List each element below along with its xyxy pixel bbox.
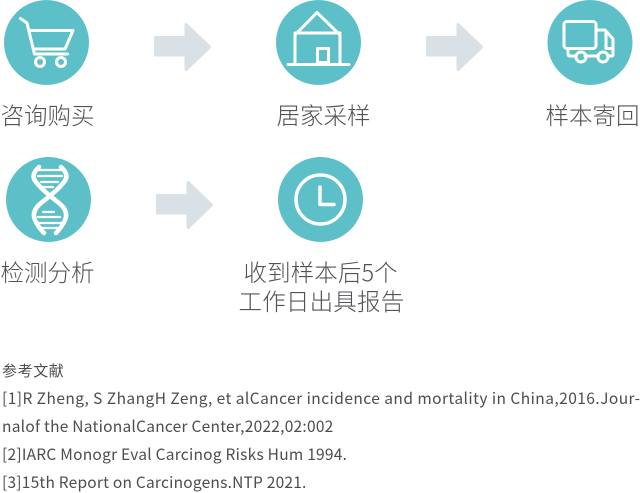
- icon: house: [276, 0, 361, 85]
- icon: shopping cart: [4, 0, 89, 85]
- references heading: 参考文献: [2, 360, 64, 381]
- references list: [2, 387, 640, 493]
- label: step 1: 咨询购买: [0, 97, 94, 131]
- label: step 3: 样本寄回: [546, 97, 640, 131]
- arrow: step 4 to step 5: [158, 182, 212, 228]
- references list: [1]R Zheng, S ZhangH Zeng, et alCancer incidence and mortality in China,2016.Jour-: [2, 387, 640, 409]
- label: step 5: [238, 254, 404, 317]
- icon: DNA helix: [6, 157, 91, 242]
- arrow: step 2 to step 3: [428, 24, 482, 70]
- icon: clock: [278, 157, 363, 242]
- label: step 5: 收到样本后5个: [244, 254, 398, 288]
- label: step 5: 工作日出具报告: [238, 283, 404, 317]
- references list: [3]15th Report on Carcinogens.NTP 2021.: [2, 471, 307, 493]
- icon: delivery truck: [548, 0, 632, 85]
- references list: nalof the NationalCancer Center,2022,02:002: [2, 415, 334, 437]
- label: step 2: 居家采样: [276, 97, 370, 131]
- arrow: step 1 to step 2: [156, 24, 210, 70]
- references list: [2]IARC Monogr Eval Carcinog Risks Hum 1994.: [2, 443, 347, 465]
- label: step 4: 检测分析: [0, 254, 94, 288]
